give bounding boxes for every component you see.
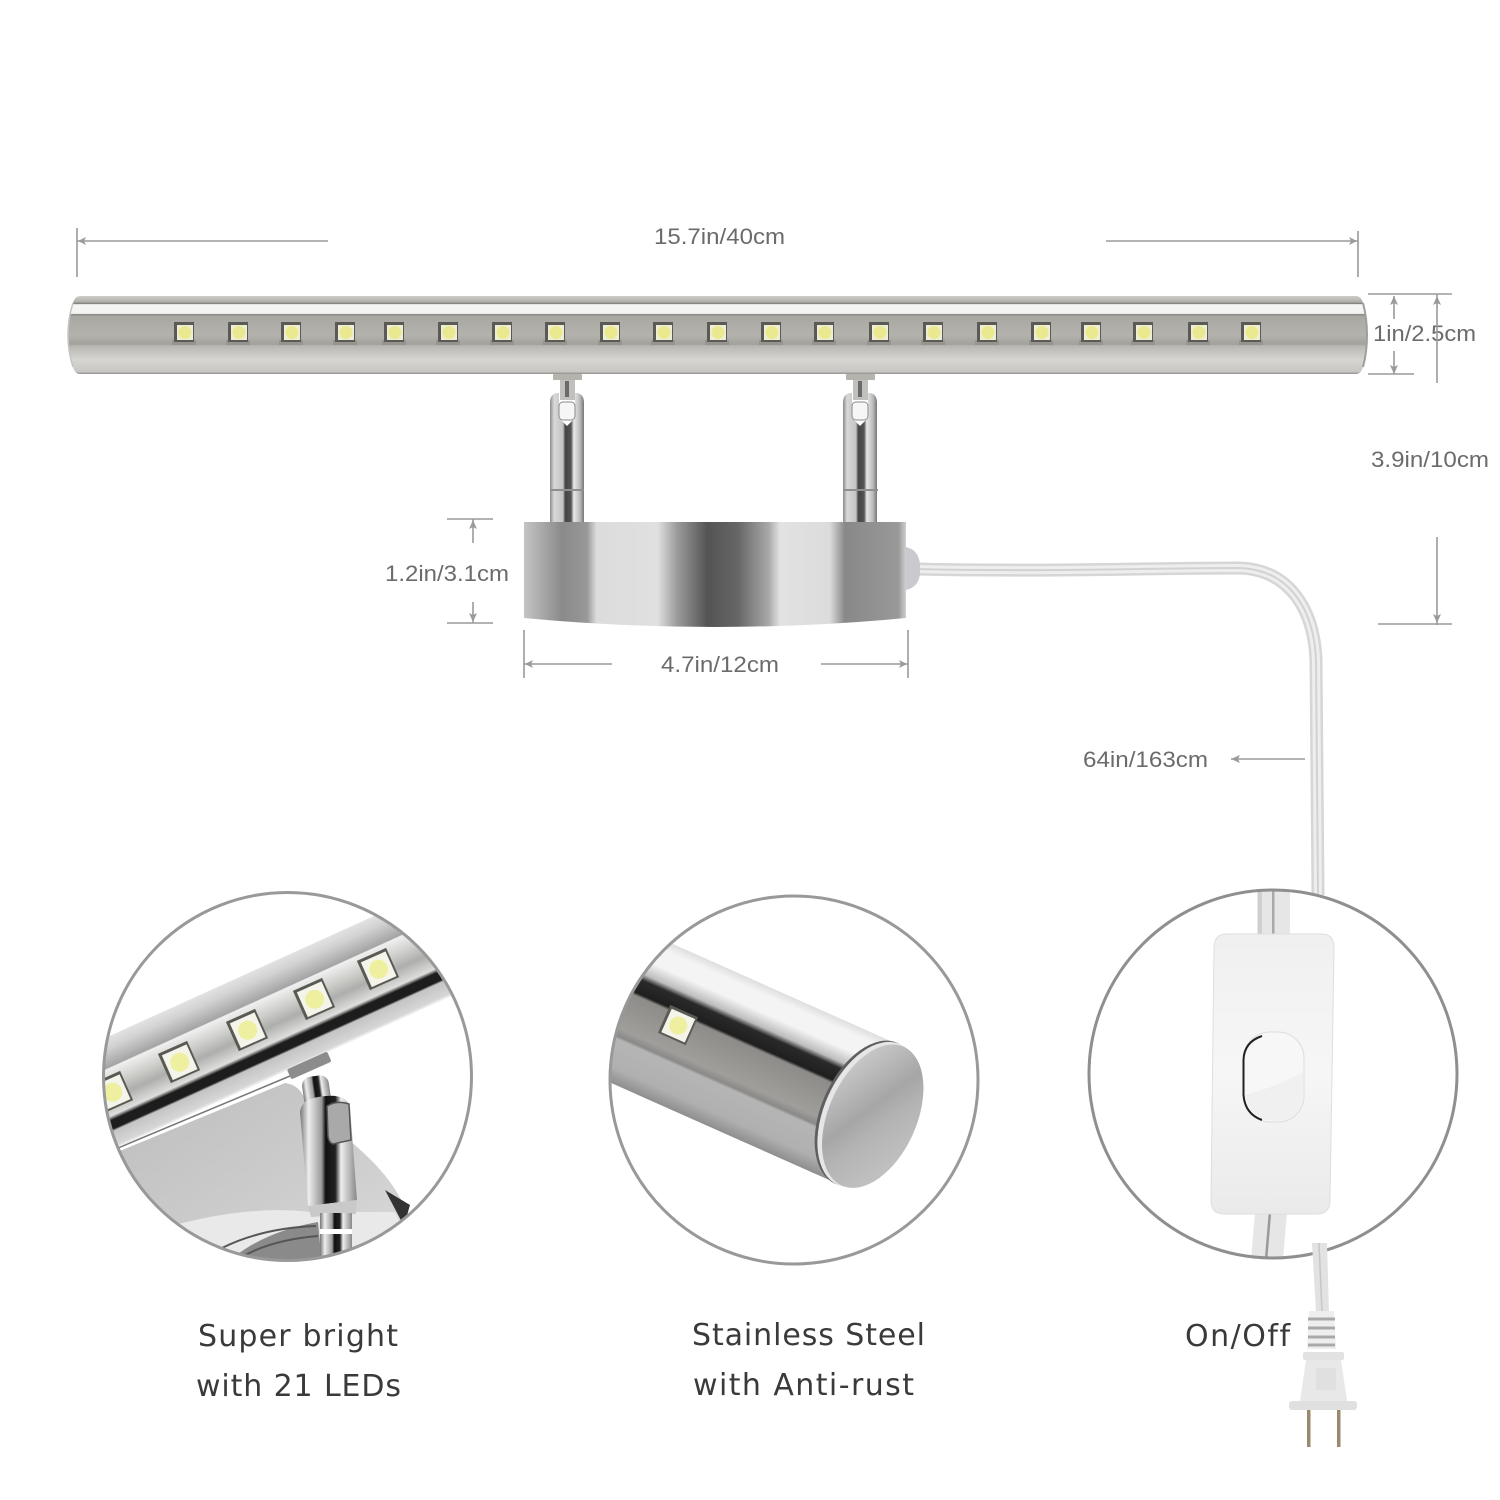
circle outline: [610, 896, 978, 1264]
LED: [658, 1005, 698, 1045]
dimension: base height 1.2in/3.1cm: 1.2in/3.1cm: [385, 561, 509, 586]
swivel joint: [287, 1051, 357, 1263]
dimension: bar height 1in/2.5cm: 1in/2.5cm: [1373, 321, 1476, 346]
caption: Stainless Steel with Anti-rust: Stainless Steel: [692, 1318, 925, 1353]
chrome tube: [105, 916, 451, 1147]
switch housing: [1211, 934, 1334, 1214]
caption: Super bright with 21 LEDs: [196, 1319, 401, 1404]
detail circle: stainless steel end cap: [608, 894, 980, 1266]
dimension: total depth 3.9in/10cm: 3.9in/10cm: [1371, 447, 1489, 472]
caption: On/Off: On/Off: [1185, 1319, 1291, 1354]
caption: Stainless Steel with Anti-rust: [692, 1318, 925, 1403]
chrome back plate: [119, 1075, 410, 1259]
end cap: [814, 1040, 924, 1188]
circle outline: [104, 892, 472, 1260]
LEDs: [91, 948, 399, 1113]
dimension: cord length 64in/163cm: 64in/163cm: [1083, 747, 1208, 772]
steel tube: [612, 944, 890, 1180]
cords through switch: [1251, 888, 1290, 1260]
round mounting base: [524, 522, 920, 627]
dimension: bar height 1in/2.5cm: [1368, 294, 1476, 374]
detail circle: LEDs and swivel joint: [102, 891, 473, 1262]
dimension: bar length 15.7in/40cm: [77, 224, 1358, 277]
dimension: total depth 3.9in/10cm: [1371, 294, 1489, 625]
dimension: bar length 15.7in/40cm: 15.7in/40cm: [654, 224, 785, 249]
swivel arm left: [550, 374, 584, 522]
caption: Stainless Steel with Anti-rust: with Anti-rust: [693, 1368, 914, 1403]
caption: Super bright with 21 LEDs: Super bright: [198, 1319, 398, 1354]
dimension: cord length 64in/163cm: [1083, 747, 1305, 772]
dimension: base height 1.2in/3.1cm: [385, 519, 509, 623]
dimension: base width 4.7in/12cm: 4.7in/12cm: [661, 652, 779, 677]
power cord: [916, 568, 1318, 895]
rocker button: [1244, 1032, 1304, 1122]
plug and lead: [1289, 1243, 1357, 1447]
dimension: base width 4.7in/12cm: [524, 630, 908, 678]
detail circle: on/off switch: [1089, 888, 1457, 1260]
swivel arm right: [843, 374, 878, 522]
circle outline: [1089, 890, 1457, 1258]
lamp bar with 21 LEDs: [68, 296, 1367, 374]
caption: Super bright with 21 LEDs: with 21 LEDs: [196, 1369, 401, 1404]
